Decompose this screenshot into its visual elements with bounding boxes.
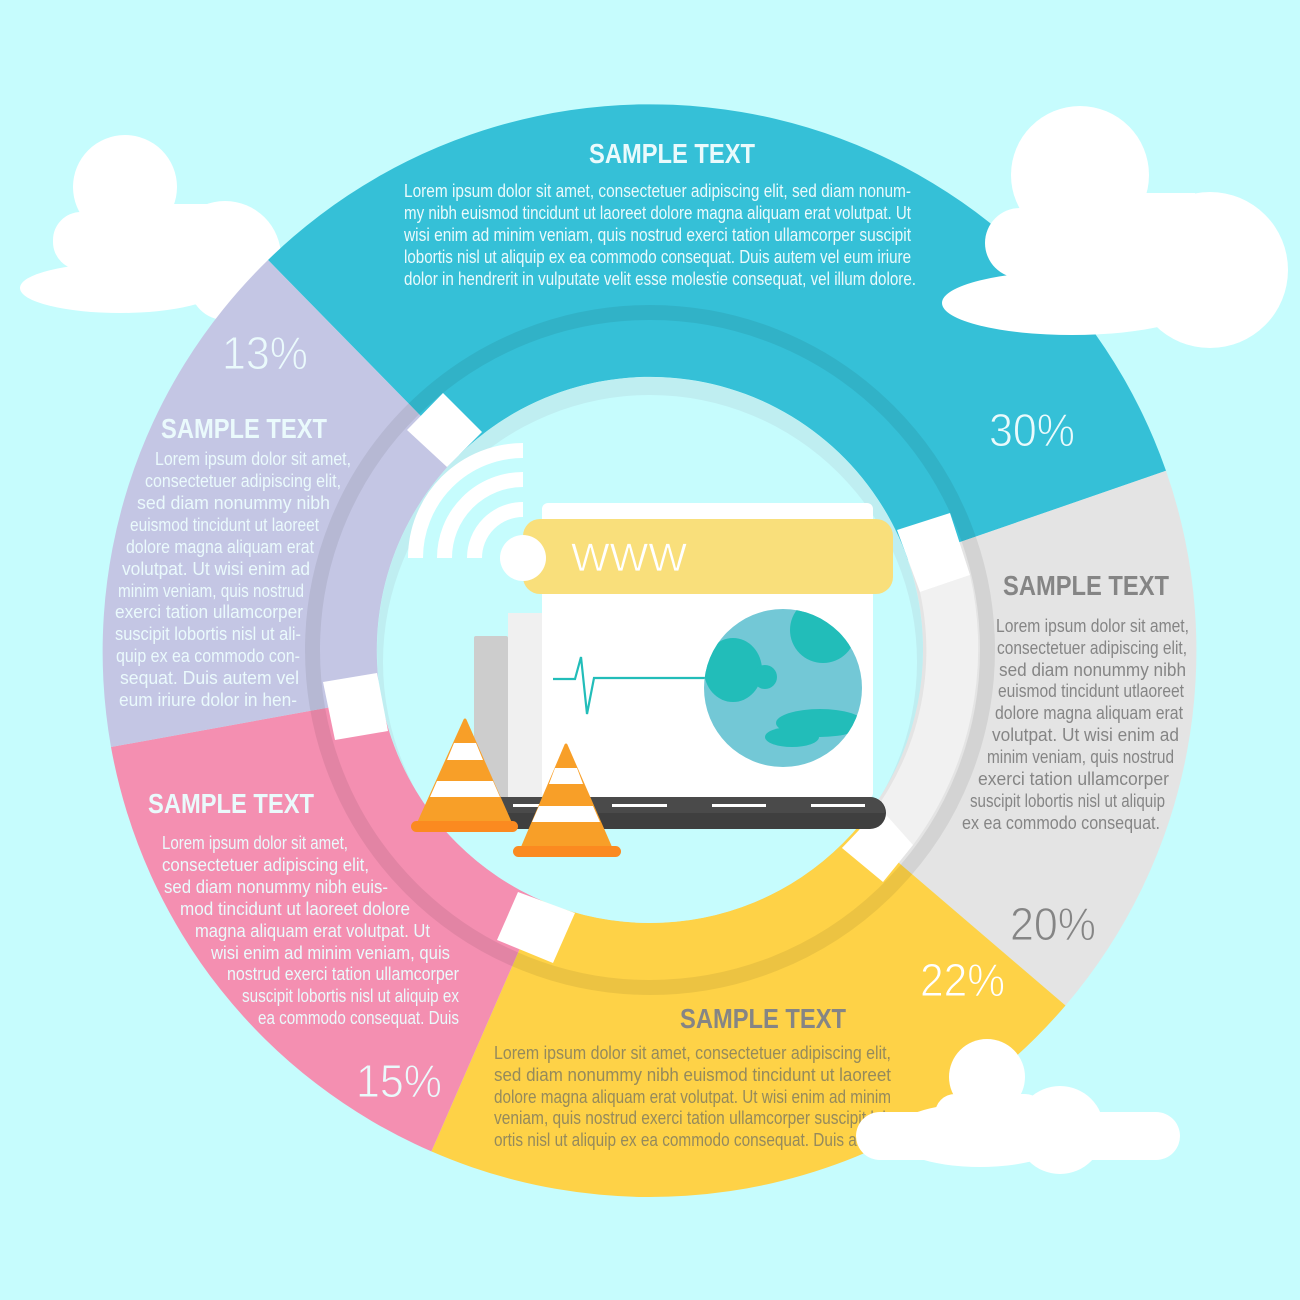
body: lavender: quip ex ea commodo con- [116, 646, 300, 666]
ring chart [103, 104, 1196, 1197]
browser window [542, 503, 873, 799]
body: yellow: Lorem ipsum dolor sit amet, consectetuer adipiscing elit, [494, 1043, 891, 1063]
percent: 15%: 15% [356, 1055, 442, 1107]
heading: pink: SAMPLE TEXT [148, 788, 314, 819]
body: pink: ea commodo consequat. Duis [258, 1008, 459, 1028]
body: teal: lobortis nisl ut aliquip ex ea commodo consequat. Duis autem vel eum iriure [404, 247, 911, 267]
heading: grey: SAMPLE TEXT [1003, 570, 1169, 601]
body: grey: exerci tation ullamcorper [978, 769, 1169, 789]
panel text: grey [962, 570, 1189, 950]
body: grey: consectetuer adipiscing elit, [997, 638, 1187, 658]
cloud: upper left [20, 135, 281, 320]
cloud: upper right [942, 106, 1288, 348]
body: pink: mod tincidunt ut laoreet dolore [180, 899, 410, 919]
body: grey: Lorem ipsum dolor sit amet, [996, 616, 1189, 636]
body: pink: nostrud exerci tation ullamcorper [227, 964, 459, 984]
body: lavender [115, 449, 351, 710]
translucent dark ring [312, 312, 988, 988]
body: grey: volutpat. Ut wisi enim ad [992, 725, 1179, 745]
panel text: yellow [494, 954, 1005, 1150]
percent: 22%: 22% [920, 954, 1005, 1006]
body: yellow: veniam, quis nostrud exerci tation ullamcorper suscipit lob [494, 1108, 891, 1128]
body: lavender: volutpat. Ut wisi enim ad [122, 559, 310, 579]
segment: teal 30% [268, 104, 1166, 560]
address bar dot [500, 535, 546, 581]
central illustration [411, 450, 893, 857]
centre hole with pale crescent [377, 377, 923, 929]
segment: lavender 13% [103, 260, 459, 747]
body: pink: wisi enim ad minim veniam, quis [210, 943, 450, 963]
segment: pink 15% [111, 698, 541, 1151]
percent: 20%: 20% [1010, 898, 1096, 950]
body: grey: minim veniam, quis nostrud [987, 747, 1174, 767]
cloud: bottom right [856, 1039, 1180, 1174]
icon: traffic cone left [411, 720, 518, 832]
body: teal: dolor in hendrerit in vulputate velit esse molestie consequat, vel illum dolore. [404, 269, 916, 289]
body: pink: Lorem ipsum dolor sit amet, [162, 833, 348, 853]
body: lavender: exerci tation ullamcorper [115, 602, 303, 622]
white notches [323, 393, 970, 963]
body: lavender: eum iriure dolor in hen- [119, 690, 297, 710]
percent: 30%: 30% [989, 404, 1075, 456]
www label: WWW [571, 536, 687, 580]
segment: yellow 22% [431, 827, 1065, 1197]
panel text: lavender [115, 327, 351, 710]
segment: grey 20% [857, 471, 1196, 1006]
heading: teal: SAMPLE TEXT [589, 138, 755, 169]
body: teal: wisi enim ad minim veniam, quis nostrud exerci tation ullamcorper suscipit [403, 225, 911, 245]
body: lavender: dolore magna aliquam erat [126, 537, 314, 557]
body: grey: dolore magna aliquam erat [995, 703, 1183, 723]
body: lavender: minim veniam, quis nostrud [118, 581, 304, 601]
panel text: pink [148, 788, 459, 1107]
body: grey: sed diam nonummy nibh [999, 660, 1186, 680]
body: yellow: sed diam nonummy nibh euismod tincidunt ut laoreet [494, 1065, 891, 1085]
icon: wifi arcs [416, 450, 523, 558]
grey back pages [474, 613, 542, 800]
body: grey: ex ea commodo consequat. [962, 813, 1160, 833]
body: teal [403, 181, 916, 289]
body: grey: euismod tincidunt utlaoreet [998, 681, 1184, 701]
light inner band on grey segment [842, 575, 978, 848]
body: pink: consectetuer adipiscing elit, [162, 855, 369, 875]
heading: yellow: SAMPLE TEXT [680, 1003, 846, 1034]
body: teal: Lorem ipsum dolor sit amet, consectetuer adipiscing elit, sed diam nonum- [404, 181, 911, 201]
body: yellow: dolore magna aliquam erat volutpat. Ut wisi enim ad minim [494, 1087, 891, 1107]
body: pink: magna aliquam erat volutpat. Ut [195, 921, 430, 941]
body: lavender: sed diam nonummy nibh [137, 493, 330, 513]
road [500, 797, 886, 829]
body: yellow: ortis nisl ut aliquip ex ea commodo consequat. Duis autem [494, 1130, 891, 1150]
body: pink [162, 833, 459, 1028]
body: lavender: euismod tincidunt ut laoreet [130, 515, 319, 535]
body: pink: sed diam nonummy nibh euis- [164, 877, 388, 897]
icon: traffic cone right [513, 745, 621, 857]
body: yellow [494, 1043, 891, 1150]
body: pink: suscipit lobortis nisl ut aliquip ex [242, 986, 459, 1006]
body: lavender: suscipit lobortis nisl ut ali- [115, 624, 301, 644]
body: lavender: sequat. Duis autem vel [120, 668, 299, 688]
body: teal: my nibh euismod tincidunt ut laoreet dolore magna aliquam erat volutpat. Ut [404, 203, 911, 223]
heading: lavender: SAMPLE TEXT [161, 413, 327, 444]
panel text: teal [403, 138, 1075, 456]
body: grey: suscipit lobortis nisl ut aliquip [970, 791, 1165, 811]
body: lavender: Lorem ipsum dolor sit amet, [155, 449, 351, 469]
address bar [523, 519, 893, 594]
body: grey [962, 616, 1189, 833]
body: lavender: consectetuer adipiscing elit, [145, 471, 341, 491]
percent: 13%: 13% [222, 327, 308, 379]
icon: globe [704, 597, 864, 767]
heartbeat line [553, 657, 705, 714]
